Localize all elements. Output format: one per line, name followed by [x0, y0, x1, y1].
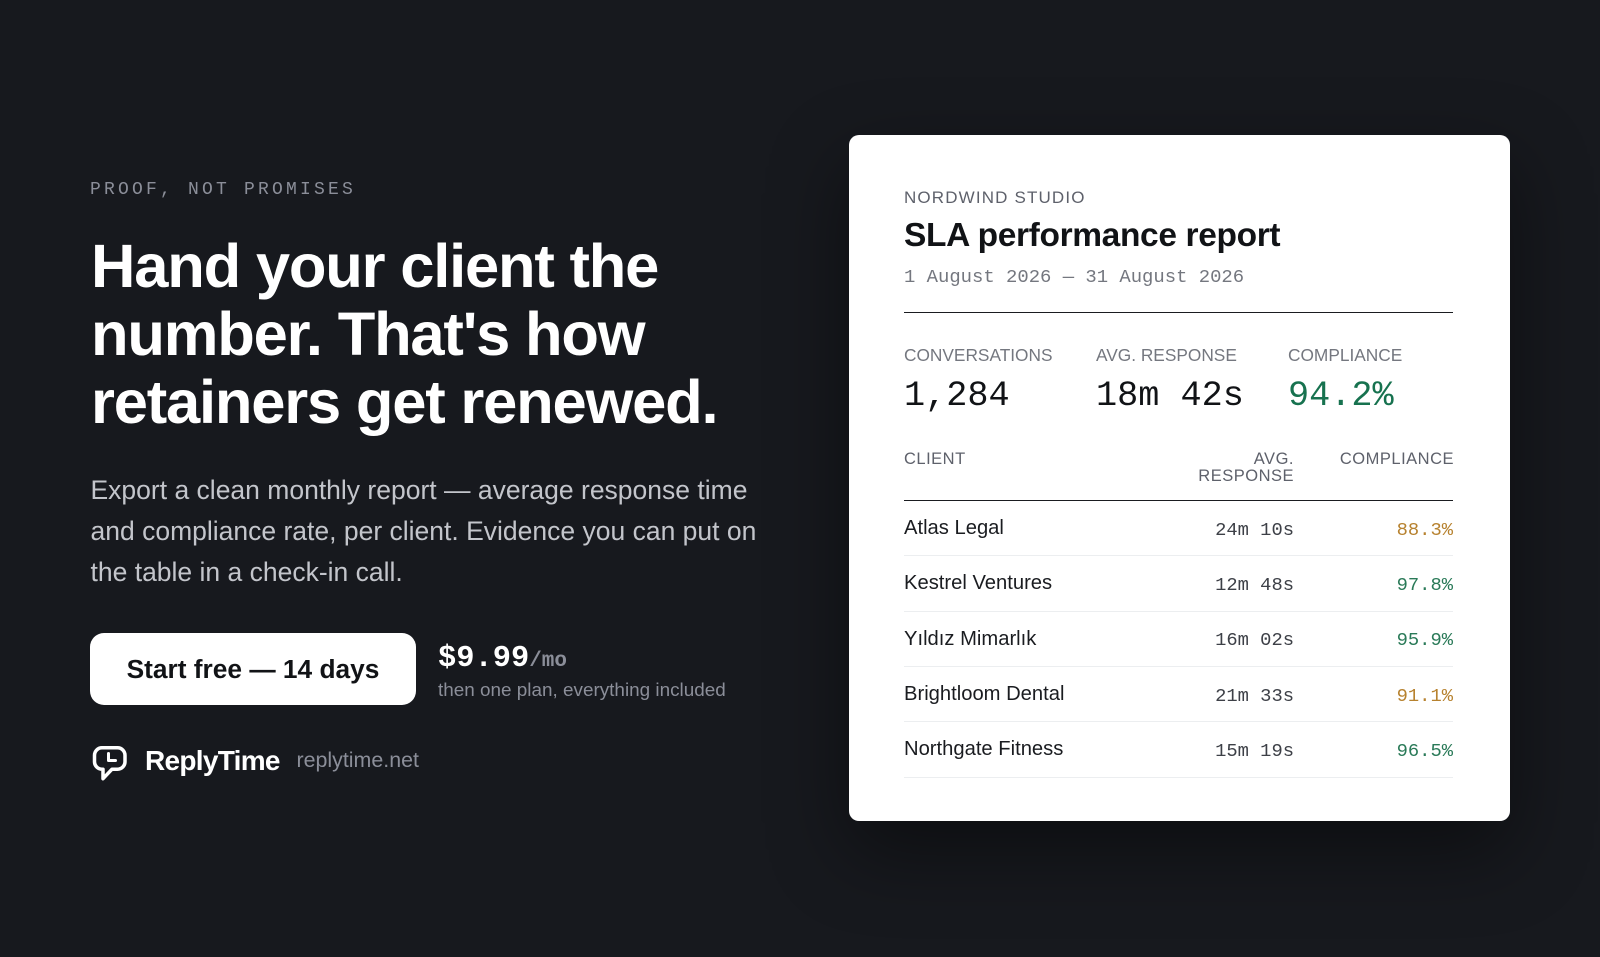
- compliance label: COMPLIANCE: [1288, 345, 1402, 365]
- table header: client: CLIENT: [904, 450, 966, 468]
- table row: Northgate Fitness: Northgate Fitness: [904, 738, 1063, 760]
- table row: Yildiz Mimarlik: 16m 02s: [1215, 629, 1294, 651]
- price note: then one plan, everything included: [438, 680, 726, 701]
- table row: Brightloom Dental: [904, 683, 1453, 706]
- eyebrow: PROOF, NOT PROMISES: [90, 180, 356, 200]
- table row: Atlas Legal: Atlas Legal: [904, 517, 1004, 539]
- panel: report card: [849, 135, 1510, 821]
- icon: speech bubble with clock: [92, 746, 127, 780]
- response value: 18m 42s: [1096, 376, 1244, 416]
- table row: Kestrel Ventures: 97.8%: [1397, 574, 1453, 596]
- conversations label: CONVERSATIONS: [904, 345, 1053, 365]
- body text: [90, 475, 756, 587]
- table row: Atlas Legal: [904, 517, 1453, 540]
- table header: compliance: COMPLIANCE: [1340, 450, 1454, 468]
- table row: Atlas Legal: 88.3%: [1397, 518, 1453, 540]
- report dates: 1 August 2026 — 31 August 2026: [904, 266, 1244, 288]
- body text: Export a clean monthly report — average response time: [90, 475, 747, 505]
- table row: Brightloom Dental: 21m 33s: [1215, 684, 1294, 706]
- response label: AVG. RESPONSE: [1096, 345, 1237, 365]
- button: start free: Start free — 14 days: [127, 654, 379, 684]
- body text: and compliance rate, per client. Evidence you can put on: [90, 516, 756, 546]
- report client name: NORDWIND STUDIO: [904, 188, 1086, 207]
- brand name: ReplyTime: [145, 745, 280, 776]
- headline: number. That's how: [91, 300, 644, 369]
- table row: Kestrel Ventures: [904, 572, 1453, 596]
- table row: Atlas Legal: 24m 10s: [1215, 518, 1294, 540]
- brand row: [92, 745, 419, 780]
- table row: Northgate Fitness: [904, 738, 1453, 762]
- stats row: [904, 345, 1402, 416]
- table row: Brightloom Dental: Brightloom Dental: [904, 683, 1064, 705]
- table row: Northgate Fitness: 96.5%: [1397, 740, 1453, 762]
- table row: Kestrel Ventures: 12m 48s: [1215, 574, 1294, 596]
- table row: Brightloom Dental: 91.1%: [1397, 684, 1453, 706]
- button: start free: [90, 633, 416, 705]
- headline: Hand your client the: [91, 232, 658, 301]
- table header: avg response: AVG.: [1254, 450, 1294, 468]
- body text: the table in a check-in call.: [90, 557, 403, 587]
- table row: Yildiz Mimarlik: 95.9%: [1397, 629, 1453, 651]
- conversations value: 1,284: [904, 376, 1010, 416]
- brand url: replytime.net: [296, 748, 419, 772]
- table header: avg response: [1198, 450, 1294, 485]
- table row: Kestrel Ventures: Kestrel Ventures: [904, 572, 1052, 594]
- table row: Yildiz Mimarlik: Yıldız Mimarlık: [904, 628, 1036, 650]
- report title: SLA performance report: [904, 216, 1280, 254]
- table row: Northgate Fitness: 15m 19s: [1215, 740, 1294, 762]
- table row: Yildiz Mimarlik: [904, 628, 1453, 651]
- price: $9.99/mo: [438, 642, 567, 676]
- headline: [91, 232, 717, 437]
- table header: avg response: RESPONSE: [1198, 467, 1294, 485]
- compliance value: 94.2%: [1288, 376, 1394, 416]
- headline: retainers get renewed.: [91, 368, 717, 437]
